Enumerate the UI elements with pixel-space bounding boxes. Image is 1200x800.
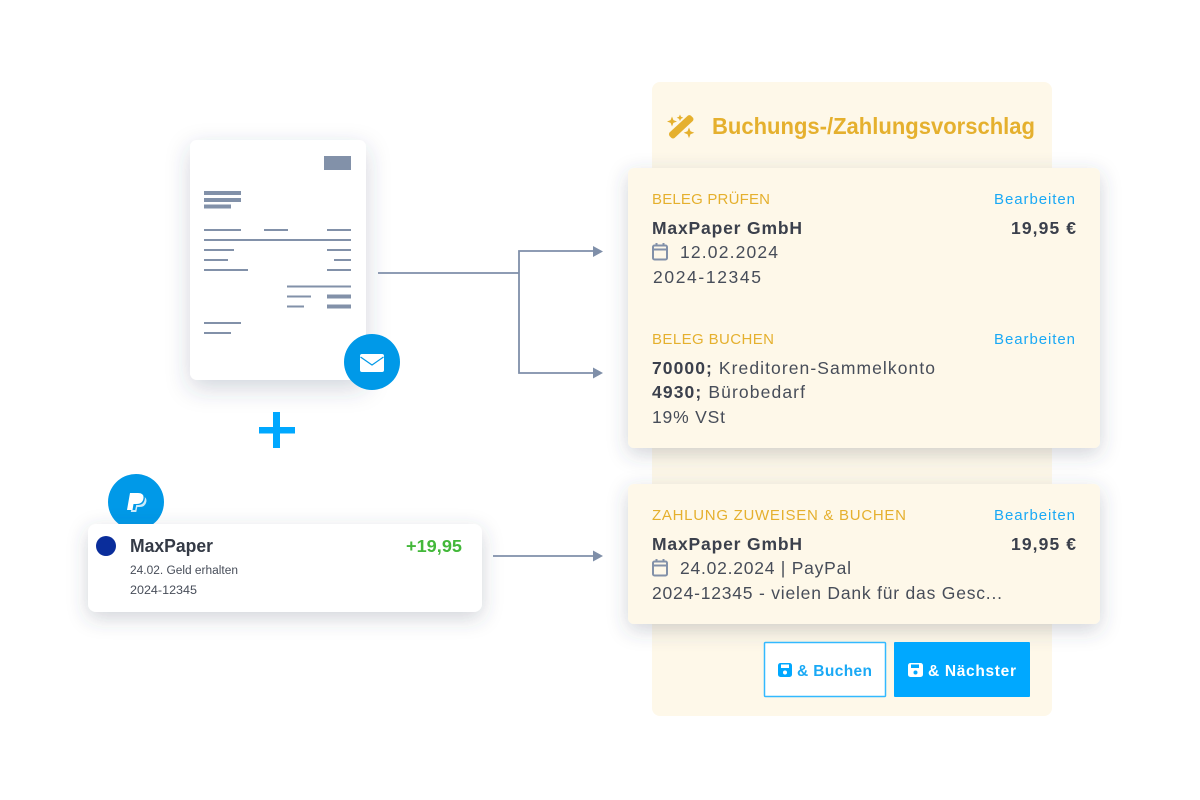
title: Buchungs-/Zahlungsvorschlag — [712, 113, 1035, 139]
payment date: 24.02.2024 | PayPal — [680, 558, 851, 578]
button: save and book — [764, 642, 886, 696]
transaction reference: 2024-12345 — [130, 585, 197, 597]
amount: 19,95 € — [1011, 534, 1076, 554]
button: save and next — [894, 642, 1030, 697]
payment reference: 2024-12345 - vielen Dank für das Gesc... — [652, 583, 1002, 603]
heading: zahlung: ZAHLUNG ZUWEISEN & BUCHEN — [652, 507, 906, 524]
document number: 2024-12345 — [653, 267, 761, 287]
panel: assign payment — [628, 484, 1100, 624]
heading: beleg pruefen: BELEG PRÜFEN — [652, 190, 770, 208]
icon: status dot — [96, 536, 116, 556]
document date: 12.02.2024 — [680, 242, 778, 262]
account debit: 4930; Bürobedarf — [652, 382, 805, 402]
panel: check and book voucher — [628, 168, 1100, 448]
transaction amount: +19,95 — [406, 536, 462, 556]
button label: & Buchen — [797, 663, 872, 680]
icon: plus — [259, 412, 295, 448]
icon: paypal badge — [108, 474, 164, 530]
amount: 19,95 € — [1011, 218, 1076, 238]
panel: proposal background — [652, 82, 1052, 716]
vendor name: MaxPaper GmbH — [652, 218, 802, 238]
arrow: transaction to payment — [493, 550, 603, 562]
link: edit: Bearbeiten — [994, 507, 1075, 524]
panel: invoice document — [190, 140, 366, 380]
link: edit: Bearbeiten — [994, 191, 1075, 208]
vendor name: MaxPaper GmbH — [652, 534, 802, 554]
link: edit: Bearbeiten — [994, 331, 1075, 348]
transaction name: MaxPaper — [130, 536, 213, 556]
icon: magic wand — [667, 114, 694, 138]
account credit: 70000; Kreditoren-Sammelkonto — [652, 358, 935, 378]
icon: save — [908, 663, 923, 677]
tax rate: 19% VSt — [652, 407, 725, 427]
icon: mail badge — [344, 334, 400, 390]
icon: calendar — [653, 243, 667, 260]
panel: bank transaction card — [88, 524, 482, 612]
button label: & Nächster — [928, 663, 1016, 680]
icon: save — [778, 663, 792, 677]
transaction date: 24.02. Geld erhalten — [130, 565, 238, 577]
icon: calendar — [653, 559, 667, 576]
heading: beleg buchen: BELEG BUCHEN — [652, 331, 774, 348]
arrow: invoice to proposal sections — [378, 246, 603, 378]
